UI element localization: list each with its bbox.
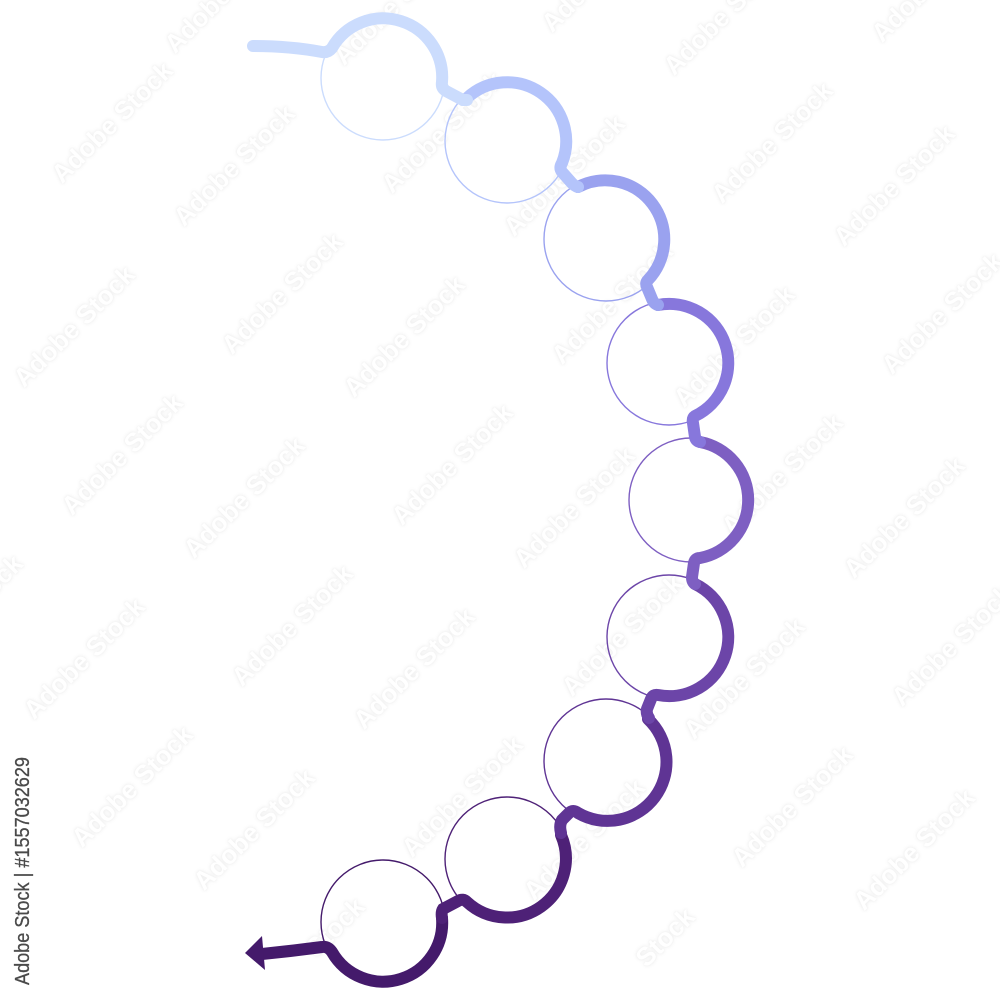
watermark pattern: Adobe Stock [187, 762, 321, 896]
segment 3 [578, 180, 664, 305]
watermark pattern: Stock [299, 891, 371, 963]
arrowhead [245, 936, 265, 970]
watermark pattern: Adobe Stock [337, 269, 471, 403]
segment 7 [560, 719, 667, 833]
watermark pattern: Adobe Stock [7, 259, 141, 393]
watermark pattern: Adobe Stock [225, 558, 359, 692]
watermark pattern: Adobe Stock [17, 591, 151, 725]
thin outline circles [321, 16, 753, 984]
watermark pattern: Adobe Stock [65, 719, 199, 853]
watermark pattern: Adobe Stock [507, 440, 641, 574]
stock credit text: Adobe Stock | #1557032629 [12, 757, 34, 985]
segment 2 [467, 82, 578, 187]
watermark pattern: Adobe Stock [555, 568, 689, 702]
watermark pattern: Adobe Stock [847, 782, 981, 916]
segment 9 with arrow tail [262, 918, 442, 982]
watermark pattern: Adobe Stock [677, 611, 811, 745]
watermark pattern: Adobe Stock [215, 226, 349, 360]
segment 8 [442, 835, 566, 918]
watermark pattern: Adobe Stock [45, 55, 179, 189]
watermark pattern: Adobe Stock [545, 236, 679, 370]
watermark pattern: Adobe Stock [517, 772, 651, 906]
watermark pattern: Adobe Stock [837, 450, 971, 584]
watermark pattern: Adobe Stock [177, 430, 311, 564]
watermark pattern: Adobe Stock [347, 601, 481, 735]
watermark pattern: Adobe Stock [395, 729, 529, 863]
watermark pattern: Adobe Stock [55, 387, 189, 521]
segment 4 [658, 304, 728, 442]
watermark pattern: Adobe Stock [705, 75, 839, 209]
segment 1 [253, 18, 467, 100]
watermark pattern: Adobe Stock [667, 279, 801, 413]
watermark pattern: Adobe Stock [385, 397, 519, 531]
watermark pattern: Adobe Stock [715, 407, 849, 541]
thick path segments [253, 18, 748, 982]
segment 6 [647, 584, 728, 718]
watermark pattern: Adobe Stock [827, 118, 961, 252]
watermark pattern: Adobe Stock [375, 65, 509, 199]
watermark pattern: Stock [629, 901, 701, 973]
watermark pattern: Adobe Stock [167, 98, 301, 232]
watermark pattern: Adobe Stock [497, 108, 631, 242]
segment 5 [692, 442, 748, 584]
watermark pattern: Adobe Stock [725, 739, 859, 873]
